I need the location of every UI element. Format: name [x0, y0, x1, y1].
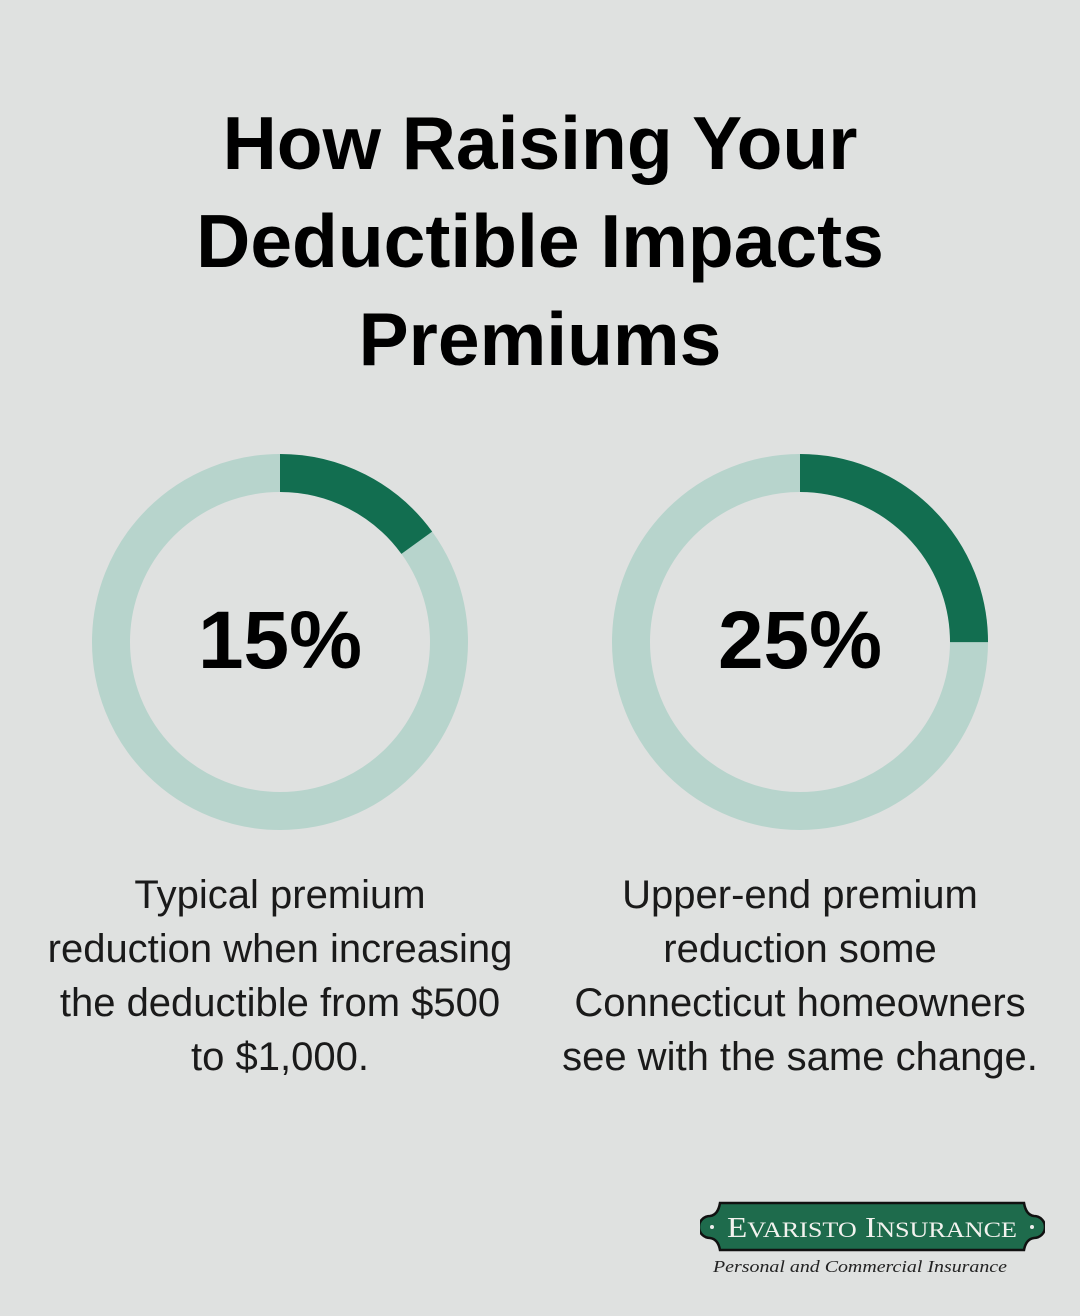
description: 15%: to $1,000.: [191, 1035, 369, 1079]
title: How Raising Your: [223, 101, 857, 185]
description: 15%: the deductible from $500: [60, 981, 500, 1025]
description: 25%: Connecticut homeowners: [574, 981, 1026, 1025]
logo: EVARISTO INSURANCE: [727, 1213, 1017, 1244]
donut chart: 25%: 25%: [718, 595, 882, 686]
title: Premiums: [359, 297, 721, 381]
donut chart: 25%: [612, 454, 988, 830]
logo: [700, 1202, 1045, 1276]
description: 25%: [562, 873, 1038, 1079]
logo: Personal and Commercial Insurance: [712, 1257, 1008, 1276]
description: 15%: Typical premium: [134, 873, 426, 917]
description: 25%: see with the same change.: [562, 1035, 1038, 1079]
title: [196, 101, 884, 381]
description: 25%: reduction some: [663, 927, 937, 971]
description: 25%: Upper-end premium: [622, 873, 978, 917]
description: 15%: [48, 873, 512, 1079]
donut chart: 15%: [92, 454, 468, 830]
description: 15%: reduction when increasing: [48, 927, 512, 971]
title: Deductible Impacts: [196, 199, 884, 283]
donut chart: 15%: 15%: [198, 595, 362, 686]
